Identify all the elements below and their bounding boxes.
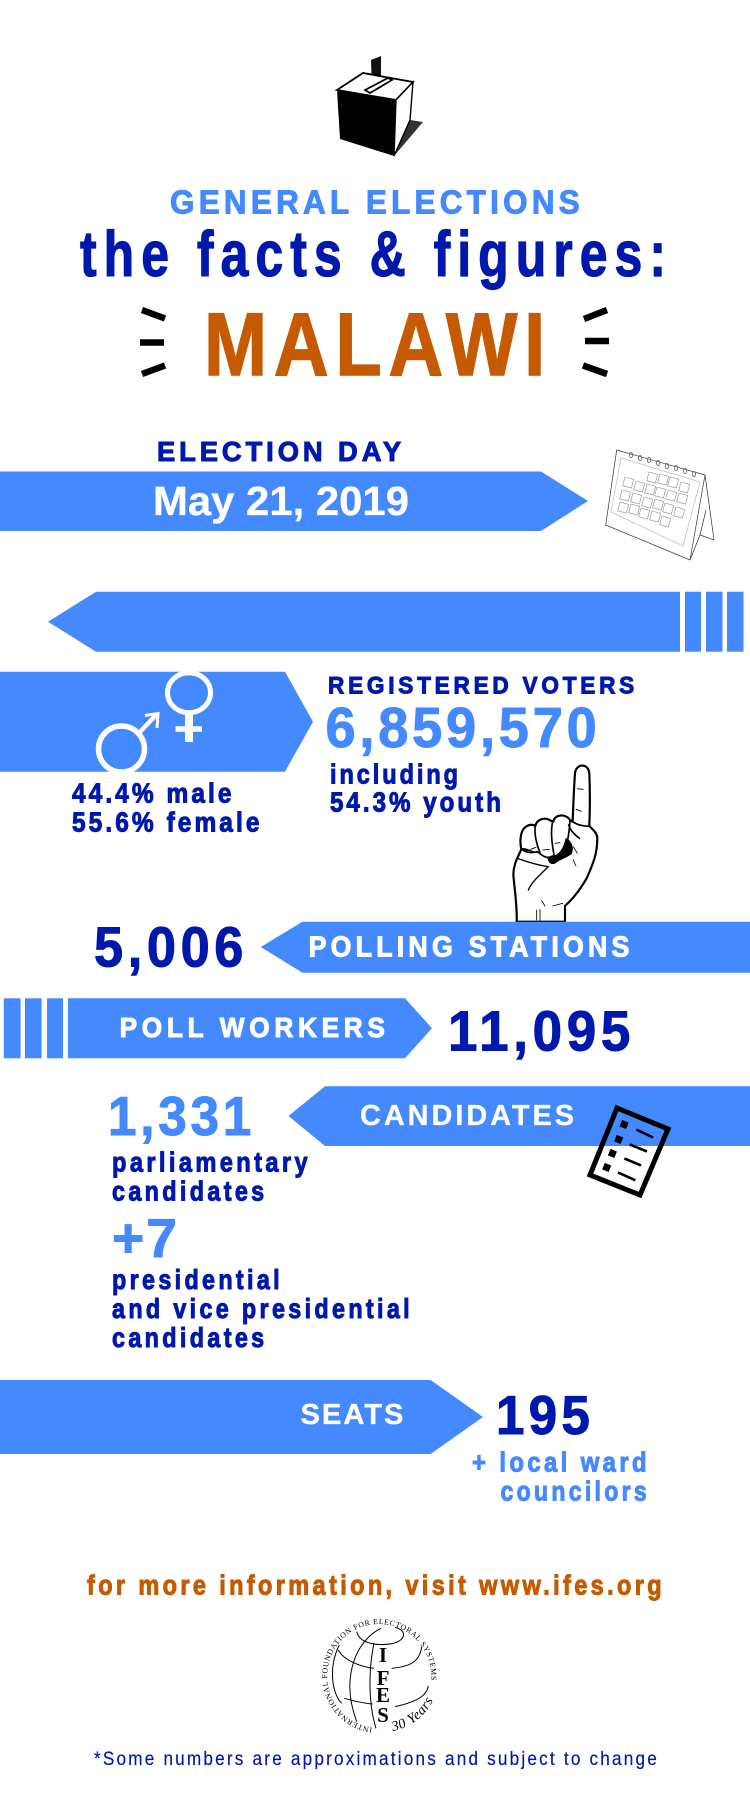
logo: IFES globe: 30 Years: [392, 1698, 432, 1731]
arrow: seats: [0, 1380, 483, 1454]
text: presidential candidates: presidential: [112, 1264, 283, 1295]
text: youth share: including: [330, 758, 461, 789]
arrow: election date: [0, 472, 588, 531]
arrow: seats: SEATS: [300, 1399, 406, 1431]
number: registered voters: 6,859,570: [326, 696, 600, 760]
icon: raised index finger hand: [513, 766, 597, 922]
text: youth share: 54.3% youth: [330, 787, 504, 818]
number: parliamentary candidates: 1,331: [108, 1085, 255, 1147]
text: gender split: [72, 778, 262, 838]
text: presidential candidates: [112, 1264, 413, 1353]
number: poll workers: 11,095: [448, 1000, 635, 1064]
arrow: decorative left-pointing banner: [48, 592, 744, 652]
arrow: election date: May 21, 2019: [153, 478, 409, 524]
text: parliamentary candidates: parliamentary: [112, 1146, 311, 1178]
arrow: candidates: [288, 1086, 750, 1146]
text: youth share: [330, 758, 504, 818]
logo: IFES globe: I: [379, 1643, 387, 1667]
icon: male symbol: [98, 714, 158, 772]
logo: IFES globe: F: [377, 1666, 389, 1690]
arrow: polling stations: POLLING STATIONS: [309, 932, 634, 964]
arrow: polling stations: [261, 922, 750, 973]
heading: general elections: GENERAL ELECTIONS: [170, 184, 584, 220]
number: polling stations: 5,006: [94, 916, 248, 980]
icon: ballot box: [337, 56, 423, 156]
logo: IFES globe: S: [377, 1703, 389, 1727]
icon: desk calendar: [606, 450, 714, 560]
footnote: *Some numbers are approximations and subject to change: [94, 1748, 659, 1770]
text: presidential candidates: candidates: [112, 1322, 268, 1353]
logo: IFES globe: INTERNATIONAL FOUNDATION FOR ELECTORAL SYSTEMS: [322, 1618, 436, 1733]
title: Malawi with rays: MALAWI: [204, 294, 552, 394]
arrow: candidates: CANDIDATES: [360, 1100, 577, 1132]
icon: candidate checklist: [590, 1108, 668, 1195]
text: parliamentary candidates: candidates: [112, 1175, 268, 1206]
text: gender split: 44.4% male: [72, 778, 234, 809]
number: presidential candidates: +7: [112, 1207, 179, 1269]
text: parliamentary candidates: [112, 1146, 311, 1206]
heading: registered voters: REGISTERED VOTERS: [328, 672, 638, 700]
text: local ward councilors: [472, 1446, 650, 1507]
logo: IFES globe: E: [376, 1683, 390, 1707]
arrow: poll workers: [4, 998, 432, 1058]
icon: female symbol: [168, 673, 210, 742]
text: presidential candidates: and vice presidential: [112, 1293, 413, 1324]
arrow: gender banner with symbols: [0, 672, 313, 772]
text: gender split: 55.6% female: [72, 807, 262, 838]
heading: election day: ELECTION DAY: [157, 436, 405, 467]
arrow: poll workers: POLL WORKERS: [120, 1012, 390, 1043]
text: local ward councilors: councilors: [500, 1476, 650, 1507]
text: local ward councilors: + local ward: [472, 1446, 650, 1477]
number: seats: 195: [496, 1384, 594, 1446]
